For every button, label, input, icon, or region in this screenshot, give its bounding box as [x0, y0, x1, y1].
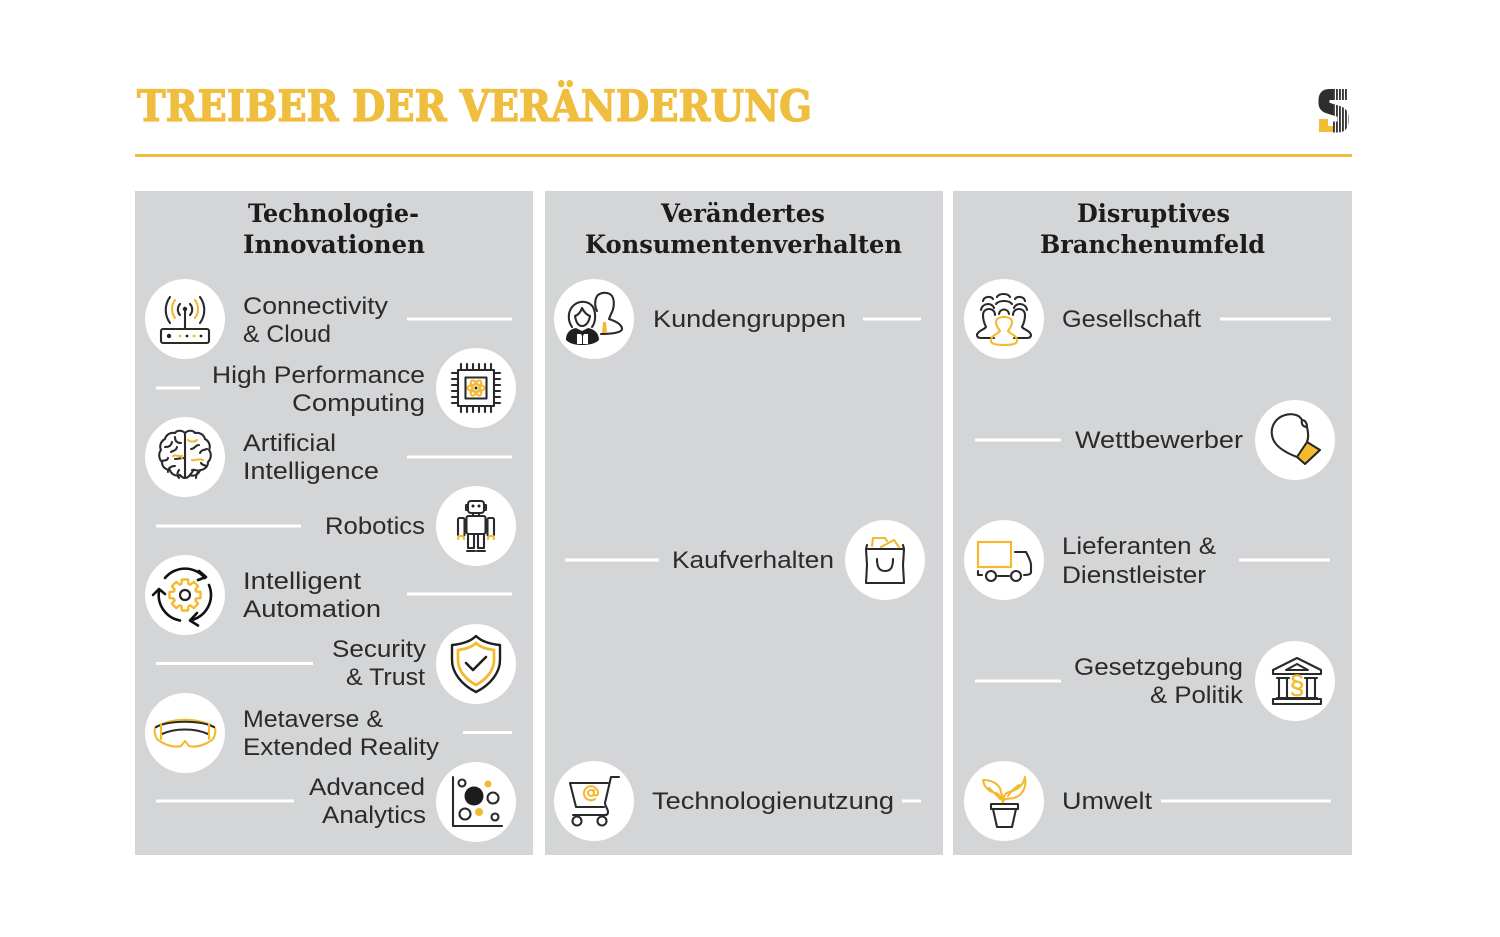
label: Intelligent Automation: Automation: [243, 596, 381, 623]
label: Metaverse & Extended Reality: Metaverse &: [243, 706, 383, 733]
label: Artificial Intelligence: [243, 430, 379, 485]
icon: shopping bag: [866, 538, 904, 583]
item: Robotics: [156, 486, 516, 566]
icon: boxing glove: [1272, 414, 1320, 464]
icon: scatter chart: [453, 777, 502, 826]
panel heading: Disruptives Branchenumfeld: [1040, 199, 1265, 259]
item: Connectivity & Cloud: [145, 279, 512, 359]
item: Metaverse & Extended Reality: [145, 693, 512, 773]
icon: router: [161, 297, 209, 343]
label: Robotics: Robotics: [325, 513, 425, 540]
item: Security & Trust: [156, 624, 516, 704]
label: Kundengruppen: Kundengruppen: [653, 306, 846, 333]
icon: processor chip: [452, 364, 500, 412]
icon: customer group: [566, 293, 622, 345]
item: Kaufverhalten: [565, 520, 925, 600]
panel heading: Technologie-Innovationen: Technologie-: [248, 199, 419, 228]
label: Gesellschaft: Gesellschaft: [1062, 306, 1201, 333]
item: High Performance Computing: [156, 348, 516, 428]
label: Security & Trust: [332, 636, 427, 691]
label: Gesetzgebung & Politik: & Politik: [1150, 682, 1244, 709]
label: High Performance Computing: Computing: [292, 390, 425, 417]
label: Umwelt: Umwelt: [1062, 788, 1152, 815]
icon: gear with rotating arrows: [153, 569, 211, 626]
item: Wettbewerber: [975, 400, 1335, 480]
item: Lieferanten & Dienstleister: [964, 520, 1330, 600]
label: Advanced Analytics: [309, 774, 426, 829]
item: Technologienutzung: [554, 761, 921, 841]
label: High Performance Computing: [212, 362, 425, 417]
icon: robot: [458, 501, 494, 551]
label: Gesetzgebung & Politik: [1074, 654, 1244, 709]
icon: court building with paragraph sign: §: [1289, 670, 1305, 700]
item: Umwelt: [964, 761, 1331, 841]
label: Artificial Intelligence: Artificial: [243, 430, 336, 457]
item: Advanced Analytics: [156, 762, 516, 842]
panel: Technologie-Innovationen: [135, 191, 533, 855]
logo: S mark: [1319, 94, 1348, 132]
icon: crowd of people: [977, 294, 1031, 345]
item: Gesetzgebung & Politik: [975, 641, 1335, 721]
title: TREIBER DER VERÄNDERUNG: [137, 80, 812, 132]
label: Lieferanten & Dienstleister: [1062, 533, 1216, 589]
panel heading: Verändertes Konsumentenverhalten: Verändertes: [660, 199, 825, 228]
panel: Disruptives Branchenumfeld: [953, 191, 1352, 855]
label: Metaverse & Extended Reality: [243, 706, 440, 761]
label: Intelligent Automation: [243, 568, 381, 623]
panel: Verändertes Konsumentenverhalten: [545, 191, 943, 855]
label: Advanced Analytics: Advanced: [309, 774, 425, 801]
label: Lieferanten & Dienstleister: Lieferanten &: [1062, 533, 1216, 560]
label: Connectivity & Cloud: Connectivity: [243, 293, 389, 320]
label: Artificial Intelligence: Intelligence: [243, 458, 379, 485]
item: Gesellschaft: [964, 279, 1331, 359]
label: Lieferanten & Dienstleister: Dienstleister: [1062, 562, 1206, 589]
label: High Performance Computing: High Performance: [212, 362, 425, 389]
label: Kaufverhalten: Kaufverhalten: [672, 547, 834, 574]
panel heading: Disruptives Branchenumfeld: Disruptives: [1077, 199, 1230, 228]
header rule: [135, 154, 1352, 157]
label: Security & Trust: Security: [332, 636, 427, 663]
icon: online shopping cart: [570, 777, 619, 826]
label: Wettbewerber: Wettbewerber: [1075, 427, 1243, 454]
label: Advanced Analytics: Analytics: [322, 802, 426, 829]
label: Security & Trust: & Trust: [346, 664, 425, 691]
item: Artificial Intelligence: [145, 417, 512, 497]
label: Connectivity & Cloud: [243, 293, 389, 348]
icon: shield with check: [452, 636, 500, 692]
icon: potted plant: [983, 777, 1025, 827]
panel heading: Disruptives Branchenumfeld: Branchenumfeld: [1040, 230, 1265, 259]
panel heading: Technologie-Innovationen: Innovationen: [243, 230, 425, 259]
label: Intelligent Automation: Intelligent: [243, 568, 361, 595]
panel heading: Verändertes Konsumentenverhalten: [585, 199, 902, 259]
label: Connectivity & Cloud: & Cloud: [243, 321, 331, 348]
item: Intelligent Automation: [145, 555, 512, 635]
icon: delivery truck: [978, 542, 1031, 581]
label: Technologienutzung: Technologienutzung: [652, 788, 894, 815]
label: Metaverse & Extended Reality: Extended Reality: [243, 734, 440, 761]
panel heading: Technologie-Innovationen: [243, 199, 425, 259]
panel heading: Verändertes Konsumentenverhalten: Konsumentenverhalten: [585, 230, 902, 259]
item: Kundengruppen: [554, 279, 921, 359]
label: Gesetzgebung & Politik: Gesetzgebung: [1074, 654, 1243, 681]
icon: XR goggles: [155, 720, 215, 747]
icon: brain: [159, 431, 211, 478]
icon: court building with paragraph sign: [1273, 658, 1321, 704]
